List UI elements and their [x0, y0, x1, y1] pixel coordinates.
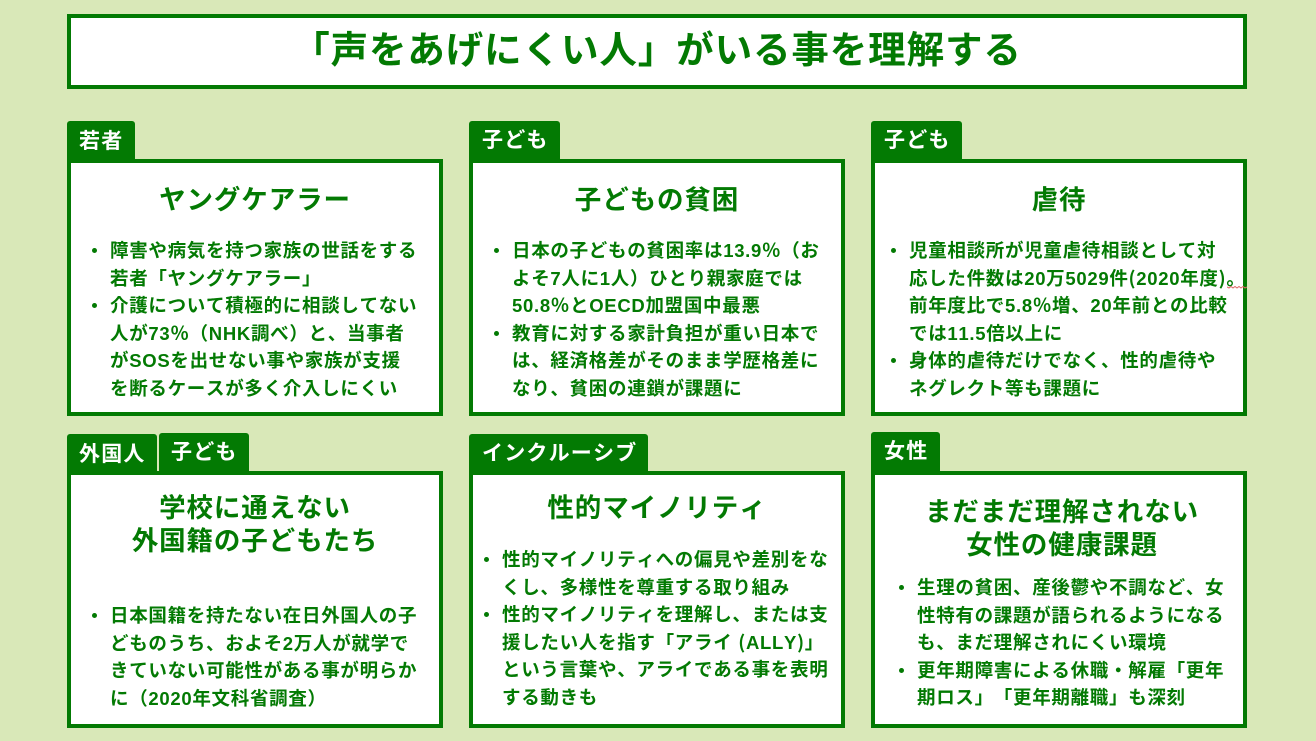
heading: まだまだ理解されない女性の健康課題: 女性の健康課題: [966, 530, 1158, 560]
panel: young carers: [67, 121, 443, 416]
bullet list: [494, 240, 820, 398]
card frame: [67, 159, 443, 416]
title: 「声をあげにくい人」がいる事を理解する: [292, 29, 1022, 71]
bullet list: なり、貧困の連鎖が課題に: [512, 378, 742, 398]
bullet list: 障害や病気を持つ家族の世話をする: [110, 240, 417, 261]
bullet list: [891, 240, 1246, 398]
bullet list: 日本の子どもの貧困率は13.9％（お: [512, 240, 820, 261]
bullet list: よそ7人に1人）ひとり親家庭では: [512, 268, 803, 288]
tag: 子ども: [159, 433, 249, 472]
tag: インクルーシブ: インクルーシブ: [482, 442, 637, 465]
bullet list: 教育に対する家計負担が重い日本で: [512, 322, 819, 344]
tag: 外国人: 外国人: [79, 443, 146, 466]
tag: 子ども: [871, 121, 962, 160]
bullet list: 児童相談所が児童虐待相談として対: [909, 240, 1216, 261]
tag: 若者: [67, 121, 135, 160]
panel: women's health: [871, 432, 1247, 728]
bullet list: 性特有の課題が語られるようになる: [917, 604, 1224, 626]
spellcheck squiggle: [1227, 286, 1247, 289]
bullet list: がSOSを出せない事や家族が支援: [110, 350, 401, 371]
bullet list: ネグレクト等も課題に: [909, 378, 1101, 398]
panel: child poverty: [469, 121, 845, 416]
tag: 女性: 女性: [884, 440, 928, 463]
bullet list: では11.5倍以上に: [909, 322, 1063, 344]
panel: foreign children: [67, 433, 443, 728]
bullet list: も、まだ理解されにくい環境: [917, 632, 1167, 653]
bullet list: 若者「ヤングケアラー」: [110, 268, 321, 288]
bullet list: どものうち、およそ2万人が就学で: [110, 632, 409, 654]
heading: 学校に通えない外国籍の子どもたち: 学校に通えない: [159, 493, 351, 523]
panel: sexual minorities: [469, 434, 845, 728]
bullet list: という言葉や、アライである事を表明: [502, 659, 828, 680]
bullet list: 介護について積極的に相談してない: [110, 295, 417, 316]
heading: まだまだ理解されない女性の健康課題: [925, 497, 1199, 560]
bullet list: 援したい人を指す「アライ (ALLY)」: [502, 628, 824, 654]
bullet list: [92, 605, 417, 708]
tag: 若者: 若者: [79, 130, 123, 153]
heading: ヤングケアラー: ヤングケアラー: [159, 185, 351, 215]
bullet list: は、経済格差がそのまま学歴格差に: [512, 350, 819, 371]
tag: 子ども: 子ども: [171, 441, 238, 464]
bullet list: を断るケースが多く介入しにくい: [110, 378, 398, 398]
heading: 学校に通えない外国籍の子どもたち: [132, 493, 378, 556]
bullet list: くし、多様性を尊重する取り組み: [502, 576, 790, 598]
bullet list: に（2020年文科省調査）: [110, 688, 327, 708]
bullet list: [899, 577, 1224, 708]
card frame: [67, 471, 443, 728]
bullet list: 日本国籍を持たない在日外国人の子: [110, 605, 417, 626]
heading: 子どもの貧困: 子どもの貧困: [575, 185, 739, 215]
heading: まだまだ理解されない女性の健康課題: まだまだ理解されない: [925, 497, 1199, 527]
heading: 虐待: 虐待: [1032, 185, 1086, 215]
bullet list: 期ロス」「更年期離職」も深刻: [917, 687, 1186, 708]
heading: 性的マイノリティ: 性的マイノリティ: [547, 493, 767, 523]
bullet list: する動きも: [502, 686, 598, 708]
bullet list: [92, 240, 417, 398]
tag: 子ども: 子ども: [482, 129, 549, 152]
title: [67, 14, 1247, 89]
bullet list: きていない可能性がある事が明らか: [110, 660, 417, 681]
tag: 外国人: [67, 434, 157, 472]
tag: 子ども: [469, 121, 560, 160]
bullet list: 前年度比で5.8％増、20年前との比較: [909, 295, 1228, 316]
bullet list: 性的マイノリティを理解し、または支: [502, 604, 828, 625]
bullet list: 50.8％とOECD加盟国中最悪: [512, 295, 761, 316]
card frame: [469, 471, 845, 728]
bullet list: 身体的虐待だけでなく、性的虐待や: [909, 350, 1216, 371]
bullet list: 人が73％（NHK調べ）と、当事者: [110, 322, 405, 344]
bullet list: 生理の貧困、産後鬱や不調など、女: [917, 577, 1224, 598]
heading: 学校に通えない外国籍の子どもたち: 外国籍の子どもたち: [132, 526, 378, 556]
bullet list: 応した件数は20万5029件(2020年度)。: [909, 264, 1246, 290]
tag: 女性: [871, 432, 940, 472]
tag: インクルーシブ: [469, 434, 648, 472]
tag: 子ども: 子ども: [884, 129, 951, 152]
bullet list: 性的マイノリティへの偏見や差別をな: [502, 549, 828, 570]
panel: child abuse: [871, 121, 1247, 416]
card frame: [871, 471, 1247, 728]
bullet list: 更年期障害による休職・解雇「更年: [917, 660, 1224, 680]
bullet list: [484, 549, 828, 708]
card frame: [871, 159, 1247, 416]
card frame: [469, 159, 845, 416]
